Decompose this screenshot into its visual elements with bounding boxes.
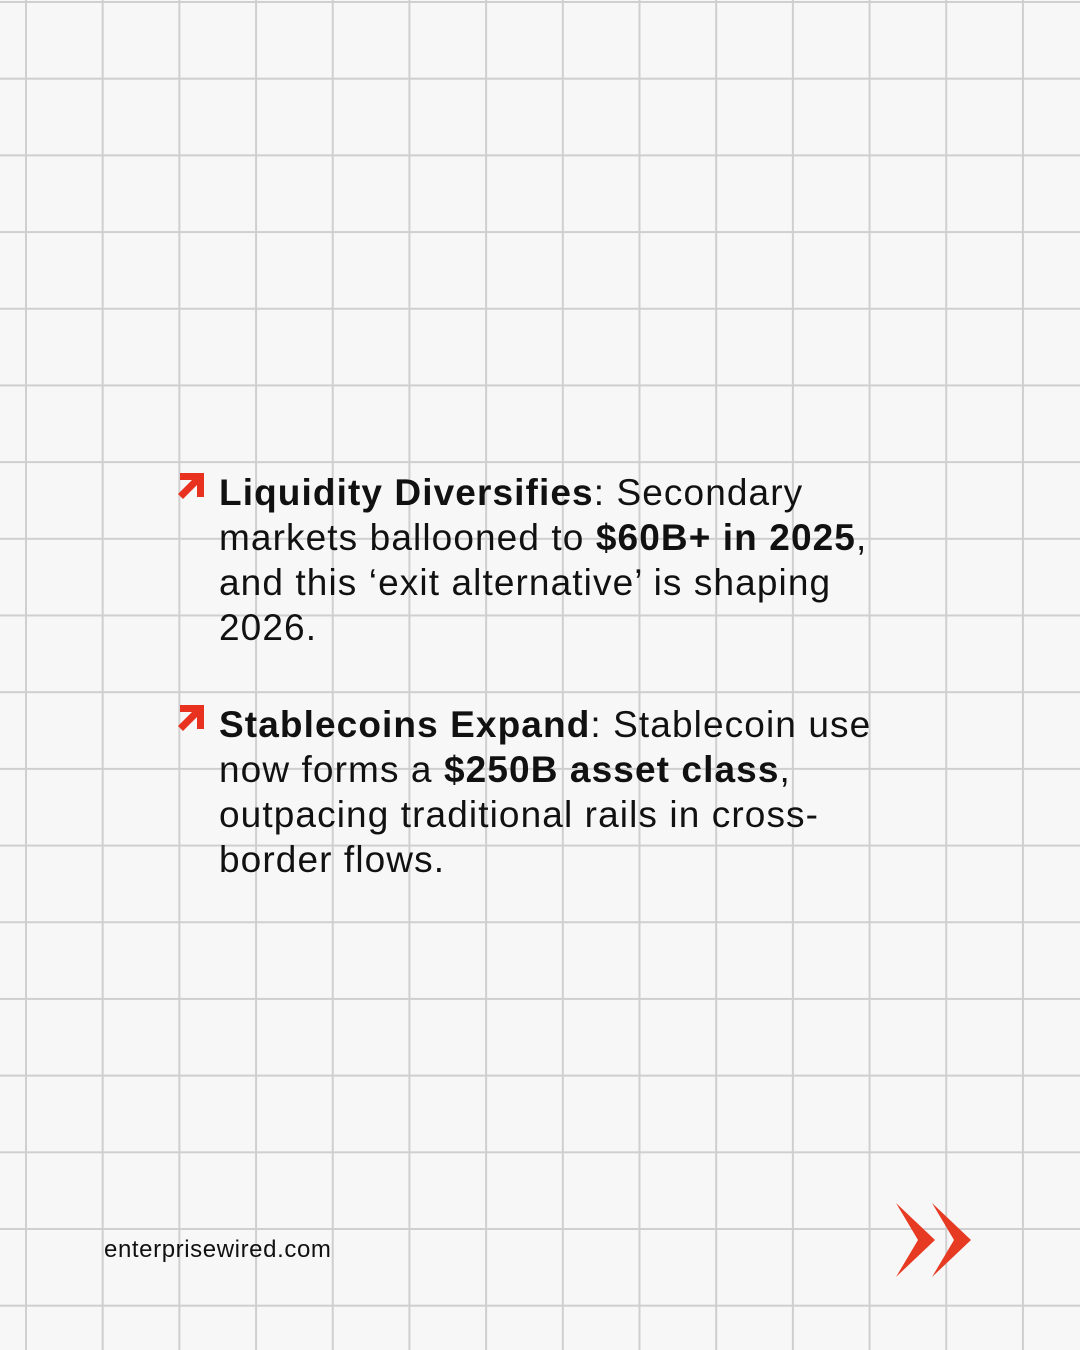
text block: stablecoins: now forms a $250B asset class, bbox=[219, 749, 791, 790]
text block: stablecoins bbox=[219, 704, 871, 880]
icon: double chevron bbox=[896, 1203, 971, 1277]
text block: liquidity: markets ballooned to $60B+ in 2025, bbox=[219, 517, 867, 558]
text block: liquidity bbox=[219, 472, 867, 648]
icon: red arrow bbox=[178, 705, 204, 731]
item: stablecoins expand bbox=[178, 704, 871, 880]
text block: stablecoins: outpacing traditional rails in cross- bbox=[219, 794, 819, 835]
text block: liquidity: and this ‘exit alternative’ is shaping bbox=[219, 562, 831, 603]
text block: stablecoins: Stablecoins Expand: Stablecoin use bbox=[219, 704, 871, 745]
text block: stablecoins: border flows. bbox=[219, 839, 445, 880]
footer url: enterprisewired.com bbox=[104, 1236, 331, 1263]
icon: red arrow bbox=[178, 473, 204, 499]
text block: liquidity: Liquidity Diversifies: Secondary bbox=[219, 472, 803, 513]
item: liquidity diversifies bbox=[178, 472, 867, 648]
text block: liquidity: 2026. bbox=[219, 607, 317, 648]
